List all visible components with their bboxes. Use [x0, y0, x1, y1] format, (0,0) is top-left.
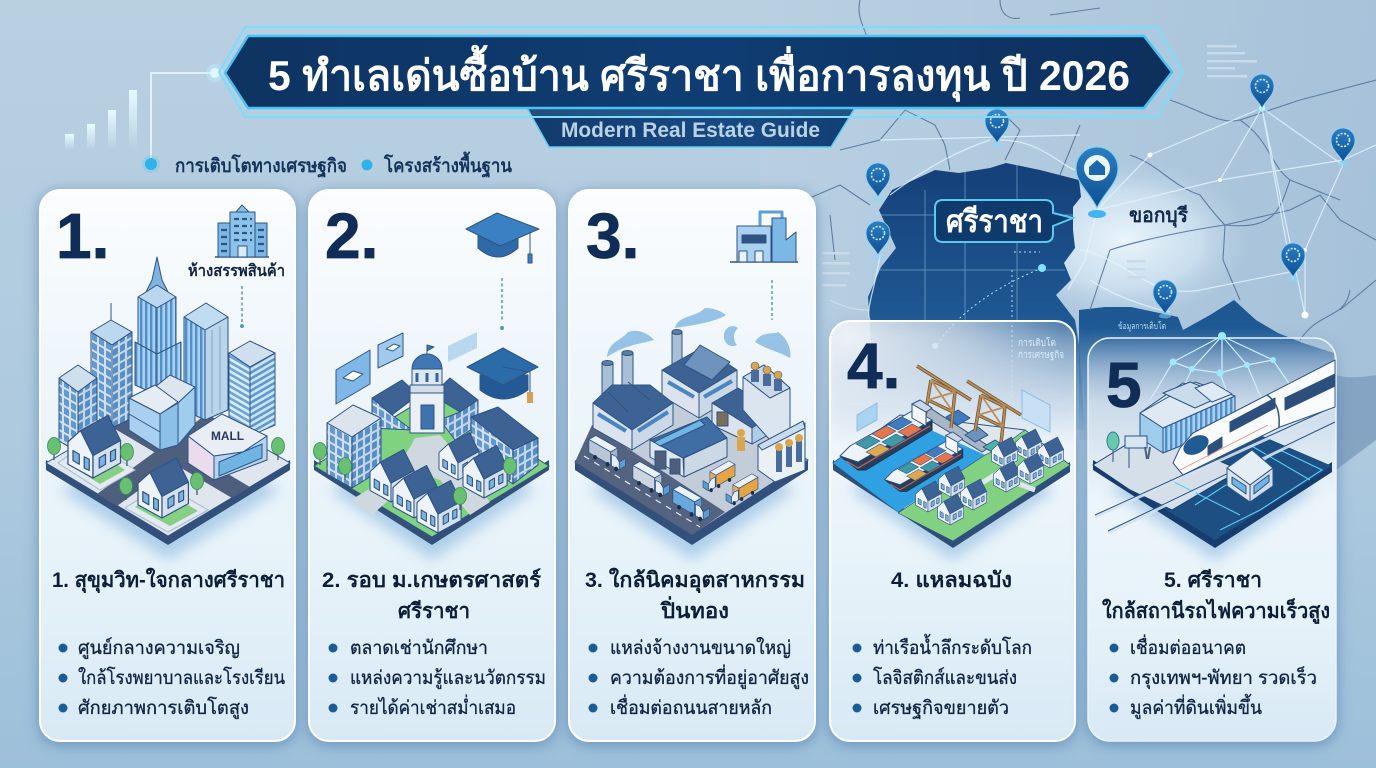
- bullet list: เชื่อมต่ออนาคต: [1130, 634, 1246, 659]
- number 4: 4.: [847, 330, 900, 402]
- bullet list: กรุงเทพฯ-พัทยา รวดเร็ว: [1130, 665, 1317, 690]
- bullet list: [1110, 634, 1317, 719]
- heading: card 4: 4. แหลมฉบัง: [891, 569, 1012, 592]
- bullet list: แหล่งความรู้และนวัตกรรม: [350, 668, 546, 689]
- illustration: university campus: [314, 332, 549, 560]
- bullet list: ความต้องการที่อยู่อาศัยสูง: [610, 664, 809, 689]
- bullet list: แหล่งจ้างงานขนาดใหญ่: [610, 637, 791, 659]
- heading: card 2: [322, 568, 542, 623]
- heading: card 2: 2. รอบ ม.เกษตรศาสตร์: [322, 568, 542, 592]
- illustration: high speed train station: [1093, 360, 1335, 560]
- legend: โครงสร้างพื้นฐาน: [383, 151, 512, 179]
- illustration: industrial estate: [575, 308, 808, 560]
- network nodes: [1150, 332, 1290, 405]
- bullet list: ศักยภาพการเติบโตสูง: [78, 696, 249, 719]
- bullet list: มูลค่าที่ดินเพิ่มขึ้น: [1130, 694, 1262, 719]
- growth bars: [65, 90, 137, 150]
- icon: office building: [215, 205, 269, 257]
- heading: card 3: [585, 567, 805, 623]
- bullet list: ศูนย์กลางความเจริญ: [78, 637, 240, 659]
- illustration: deep sea port: [833, 366, 1070, 560]
- connector line: [151, 64, 224, 160]
- bullet list: [588, 637, 809, 719]
- panel: card 4 Laem Chabang: [830, 321, 1075, 741]
- panel: card 1 Sukhumvit: [40, 190, 295, 741]
- bullet list: รายได้ค่าเช่าสม่ำเสมอ: [350, 694, 516, 719]
- illustration: city district: [46, 257, 290, 560]
- connector: dashed: [240, 286, 244, 328]
- panel: card 3 Pinthong: [569, 190, 815, 741]
- bullet list: [328, 638, 546, 719]
- legend: [142, 151, 512, 179]
- map pins: [866, 74, 1355, 318]
- subtitle ribbon: Modern Real Estate Guide: [561, 119, 820, 142]
- main location pin: [1076, 147, 1118, 218]
- title banner: [219, 27, 1183, 117]
- heading: card 5: ใกล้สถานีรถไฟความเร็วสูง: [1102, 597, 1330, 625]
- small caption: [1018, 336, 1064, 361]
- title banner: 5 ทำเลเด่นซื้อบ้าน ศรีราชา เพื่อการลงทุน ปี 2026: [268, 44, 1130, 102]
- bullet list: เชื่อมต่อถนนสายหลัก: [610, 694, 772, 719]
- icon: graduation cap: [466, 213, 539, 263]
- connector: dashed: [500, 278, 504, 330]
- callout: Sriracha: ศรีราชา: [946, 204, 1043, 239]
- map small caption: ข้อมูลการเติบโต: [1118, 321, 1166, 332]
- connector: dashed: [771, 280, 773, 320]
- heading: card 2: ศรีราชา: [398, 599, 470, 623]
- number 3: 3.: [586, 200, 639, 272]
- number 1: 1.: [56, 200, 109, 272]
- label: Chonburi: ขอกบุรี: [1129, 204, 1188, 228]
- number 2: 2.: [325, 200, 378, 272]
- heading: card 3: ปิ่นทอง: [659, 595, 729, 623]
- number 5: 5: [1106, 349, 1142, 421]
- bullet list: ใกล้โรงพยาบาลและโรงเรียน: [78, 666, 285, 689]
- heading: card 3: 3. ใกล้นิคมอุตสาหกรรม: [585, 567, 805, 594]
- bullet list: [58, 637, 285, 719]
- bullet list: ท่าเรือน้ำลึกระดับโลก: [873, 634, 1032, 659]
- subtitle ribbon: [527, 108, 855, 147]
- bullet list: โลจิสติกส์และขนส่ง: [873, 666, 1017, 689]
- heading: card 5: 5. ศรีราชา: [1164, 568, 1262, 592]
- callout: Sriracha: [935, 200, 1073, 242]
- small caption: การเศรษฐกิจ: [1018, 350, 1064, 361]
- legend: การเติบโตทางเศรษฐกิจ: [175, 154, 347, 179]
- bullet list: [852, 634, 1032, 719]
- heading: card 1: 1. สุขุมวิท-ใจกลางศรีราชา: [52, 567, 285, 594]
- small caption: การเติบโต: [1018, 336, 1056, 349]
- bullet list: ตลาดเช่านักศึกษา: [350, 638, 488, 659]
- illustration: city district: MALL: [211, 431, 244, 443]
- icon: factory: [730, 212, 798, 262]
- map: Sriracha region: [760, 0, 1376, 470]
- panel: card 2 Kasetsart: [309, 190, 555, 741]
- bullet list: เศรษฐกิจขยายตัว: [873, 698, 1009, 719]
- heading: card 5: [1102, 568, 1330, 625]
- label: department store: ห้างสรรพสินค้า: [188, 262, 285, 280]
- panel: card 5 high speed rail: [1088, 332, 1336, 741]
